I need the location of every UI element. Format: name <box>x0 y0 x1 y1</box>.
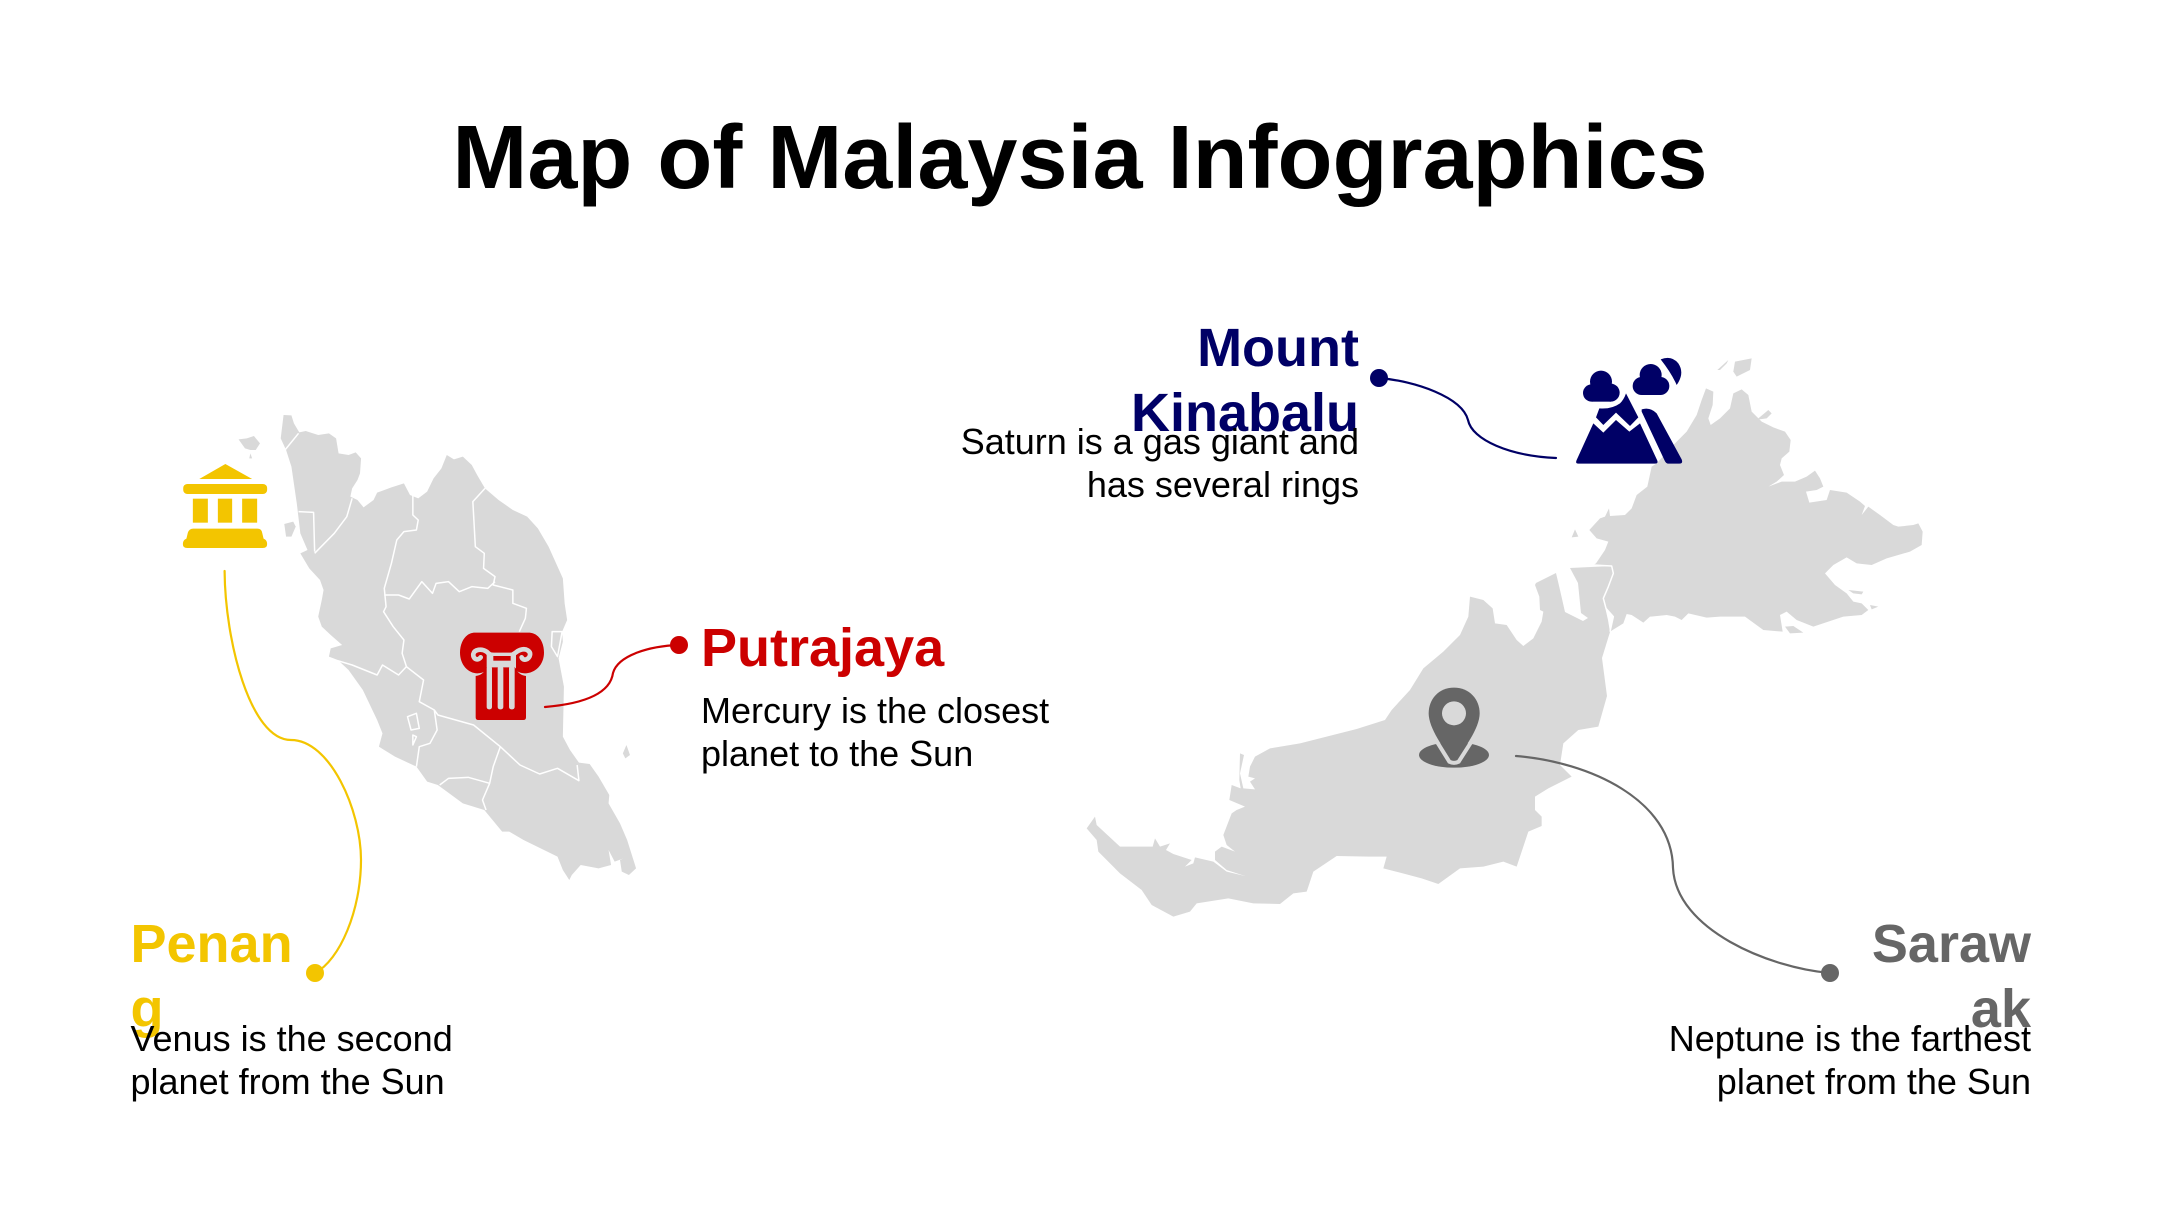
title: Map of Malaysia Infographics <box>452 108 1708 208</box>
map: Sarawak <box>1087 566 1613 917</box>
heading: Mount Kinabalu <box>1131 318 1359 443</box>
heading: Putrajaya: Putrajaya <box>701 618 944 678</box>
text: Sarawak description: planet from the Sun <box>1717 1061 2031 1102</box>
text: Sarawak description: Neptune is the farthest <box>1669 1018 2031 1059</box>
heading: Sarawak: Saraw <box>1872 914 2031 974</box>
text: Mount Kinabalu description: Saturn is a gas giant and <box>961 421 1359 462</box>
dot: Sarawak <box>1821 964 1839 982</box>
heading: Mount Kinabalu: Kinabalu <box>1131 383 1359 443</box>
map: Peninsular Malaysia <box>239 415 636 880</box>
text: Putrajaya description: Mercury is the closest <box>701 690 1049 731</box>
text: Sarawak description <box>1669 1018 2031 1102</box>
heading: Penang <box>130 914 293 1039</box>
dot: Putrajaya <box>670 636 688 654</box>
text: Putrajaya description <box>701 690 1049 774</box>
text: Penang description: planet from the Sun <box>130 1061 445 1102</box>
heading: Penang: g <box>130 979 164 1039</box>
connector: Mount Kinabalu <box>1379 378 1556 458</box>
icon: ionic column <box>460 633 544 720</box>
text: Mount Kinabalu description <box>961 421 1359 505</box>
heading: Sarawak <box>1872 914 2032 1039</box>
dot: Mount Kinabalu <box>1370 369 1388 387</box>
text: Penang description: Venus is the second <box>130 1018 453 1059</box>
heading: Penang: Penan <box>130 914 293 974</box>
icon: bank building <box>183 464 267 548</box>
icon: mountain with clouds <box>1576 358 1682 464</box>
connector: Putrajaya <box>545 645 679 707</box>
connector: Sarawak <box>1516 756 1830 973</box>
text: Putrajaya description: planet to the Sun <box>701 733 973 774</box>
text: Mount Kinabalu description: has several rings <box>1087 464 1359 505</box>
map: Sabah <box>1572 358 1923 633</box>
text: Penang description <box>130 1018 453 1102</box>
dot: Penang <box>306 964 324 982</box>
icon: location pin <box>1419 688 1489 768</box>
connector: Penang <box>225 571 361 973</box>
heading: Mount Kinabalu: Mount <box>1197 318 1359 378</box>
heading: Sarawak: ak <box>1971 979 2031 1039</box>
